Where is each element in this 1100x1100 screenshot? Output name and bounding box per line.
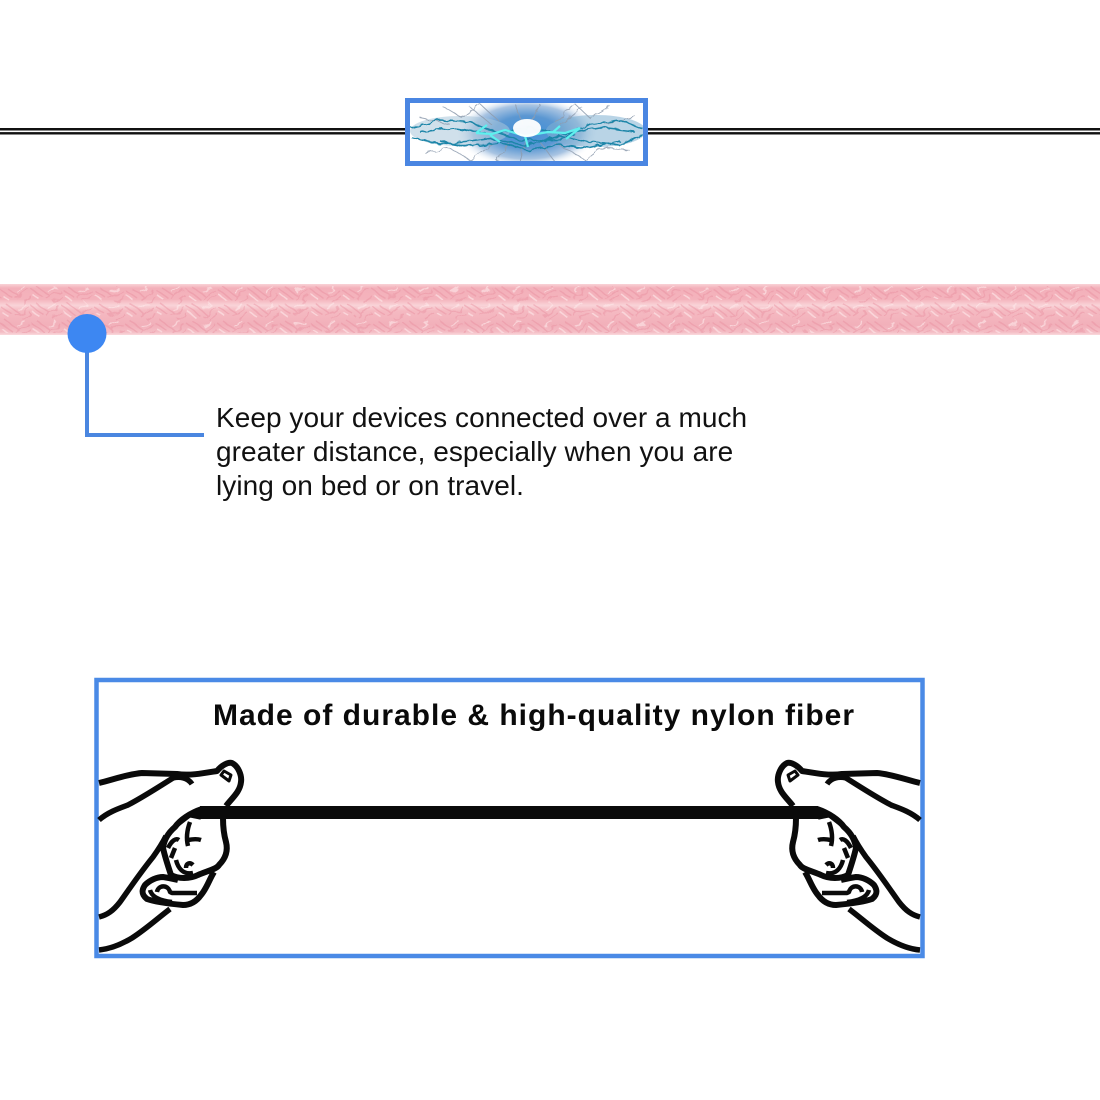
- durability panel frame: [96, 680, 922, 956]
- icon: right hand: [778, 763, 920, 950]
- callout text: [216, 402, 747, 501]
- lightning spark panel: [408, 96, 646, 168]
- cable line: left of spark: [0, 128, 406, 134]
- callout leader line: [87, 345, 204, 435]
- cable line: right of spark: [646, 128, 1100, 134]
- braided pink nylon cable: [0, 276, 1100, 343]
- icon: left hand: [99, 763, 241, 950]
- callout text: lying on bed or on travel.: [216, 470, 524, 501]
- taut black cable: [200, 806, 818, 819]
- panel heading: Made of durable & high-quality nylon fiber: [213, 699, 855, 732]
- callout marker dot: [68, 314, 106, 353]
- callout text: greater distance, especially when you are: [216, 436, 733, 467]
- callout text: Keep your devices connected over a much: [216, 402, 747, 433]
